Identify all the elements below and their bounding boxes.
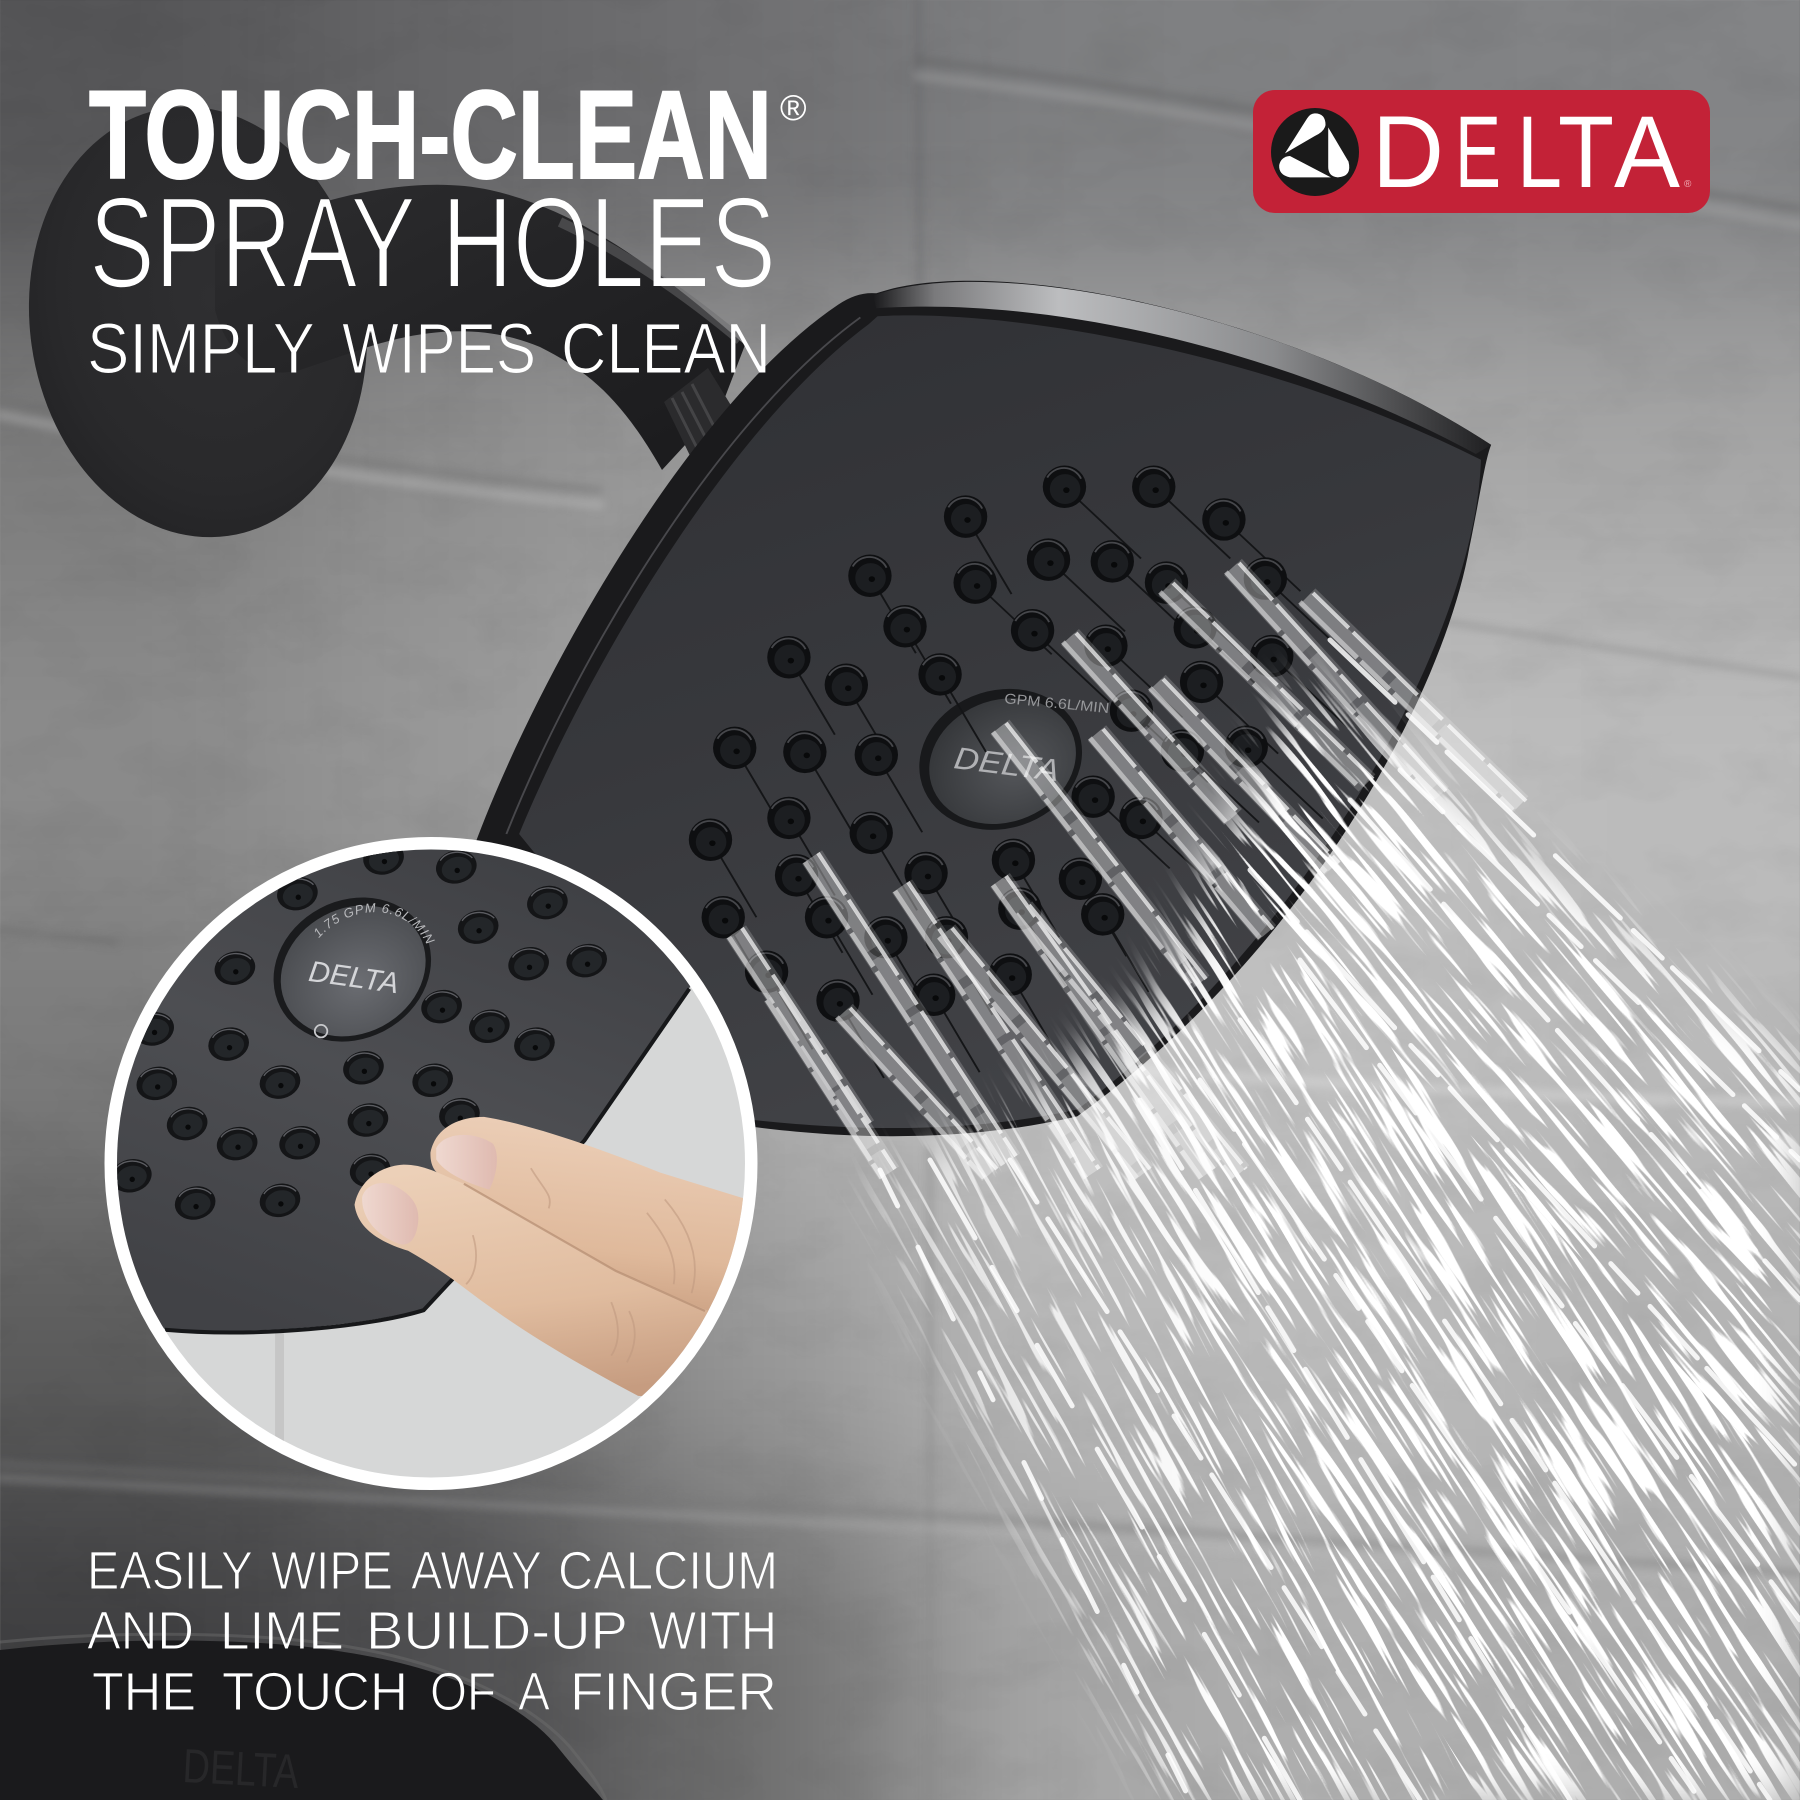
logo wordmark [1372, 95, 1680, 209]
caption: WIPE [271, 1541, 393, 1601]
spray holes [689, 465, 1348, 1078]
caption [87, 1541, 778, 1722]
translucent jet bands leaving the head [729, 563, 1526, 1178]
logo circle mark [1271, 108, 1359, 196]
caption: OF [430, 1662, 496, 1722]
flow regulator lens: DELTA [952, 740, 1062, 788]
subtitle: simply wipes clean: WIPES [342, 310, 536, 389]
logo wordmark: D [1372, 95, 1444, 209]
tub spout, lower left [0, 1634, 606, 1800]
caption: BUILD-UP [366, 1601, 628, 1661]
embossed spout logo: DELTA [181, 1740, 300, 1799]
wall flange [2, 85, 394, 559]
caption: THE [92, 1662, 196, 1722]
caption: AND [87, 1601, 194, 1661]
shower arm and flange [2, 85, 745, 559]
shower head [474, 281, 1491, 1136]
caption: TOUCH [222, 1662, 408, 1722]
flow regulator lens [889, 660, 1113, 858]
lower finger [355, 1165, 714, 1400]
subtitle: simply wipes clean: CLEAN [561, 310, 771, 389]
caption: FINGER [570, 1662, 777, 1722]
inset spray holes [107, 837, 611, 1224]
long streaks toward the lower right [880, 640, 1800, 1800]
upper finger [430, 1116, 743, 1330]
title: touch-clean: TOUCH-CLEAN [89, 66, 772, 205]
caption: CALCIUM [558, 1541, 778, 1601]
white ring [111, 844, 751, 1484]
caption: LIME [220, 1601, 344, 1661]
logo wordmark: A [1614, 95, 1680, 209]
caption: AWAY [411, 1541, 542, 1601]
water spray [729, 563, 1800, 1800]
subtitle: simply wipes clean [87, 310, 771, 389]
Delta logo badge [1253, 90, 1710, 213]
regulator lens: 1.75 GPM 6.6L/MIN [314, 903, 435, 944]
title: spray holes: SPRAY HOLES [89, 171, 776, 315]
regulator lens: DELTA [307, 955, 401, 1000]
head face [519, 315, 1481, 1128]
dense streak field [1041, 850, 1506, 1314]
tile behind head [117, 850, 745, 1478]
regulator lens [274, 898, 435, 1042]
head shell [474, 281, 1491, 1136]
logo wordmark: E [1455, 95, 1501, 209]
subtitle: simply wipes clean: SIMPLY [87, 310, 315, 389]
threaded connector [664, 368, 740, 466]
silver top rim [873, 282, 1491, 454]
caption: WITH [649, 1601, 777, 1661]
logo wordmark: T [1558, 95, 1614, 209]
flow regulator lens: GPM 6.6L/MIN [1003, 691, 1110, 717]
curved arm [215, 185, 745, 470]
registered mark: ® [1684, 179, 1692, 190]
caption: EASILY [87, 1541, 253, 1601]
logo wordmark: L [1517, 95, 1562, 209]
inset circle: finger wiping spray holes [104, 837, 758, 1490]
caption: A [518, 1662, 550, 1722]
head panel [117, 850, 690, 1330]
title: touch-clean: ® [780, 87, 807, 128]
